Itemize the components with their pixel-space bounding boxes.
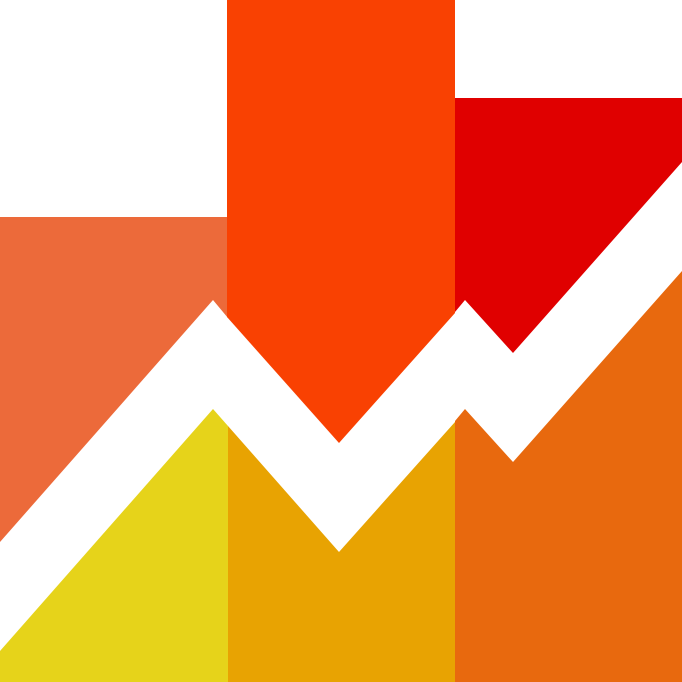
lower bar middle: amber	[228, 422, 455, 682]
lower bar left: yellow	[0, 409, 228, 682]
upper bar right: red	[455, 98, 682, 353]
lower bar right: orange	[455, 271, 682, 682]
upper bar left: coral	[0, 217, 228, 542]
upper bar middle: red-orange	[227, 0, 455, 443]
